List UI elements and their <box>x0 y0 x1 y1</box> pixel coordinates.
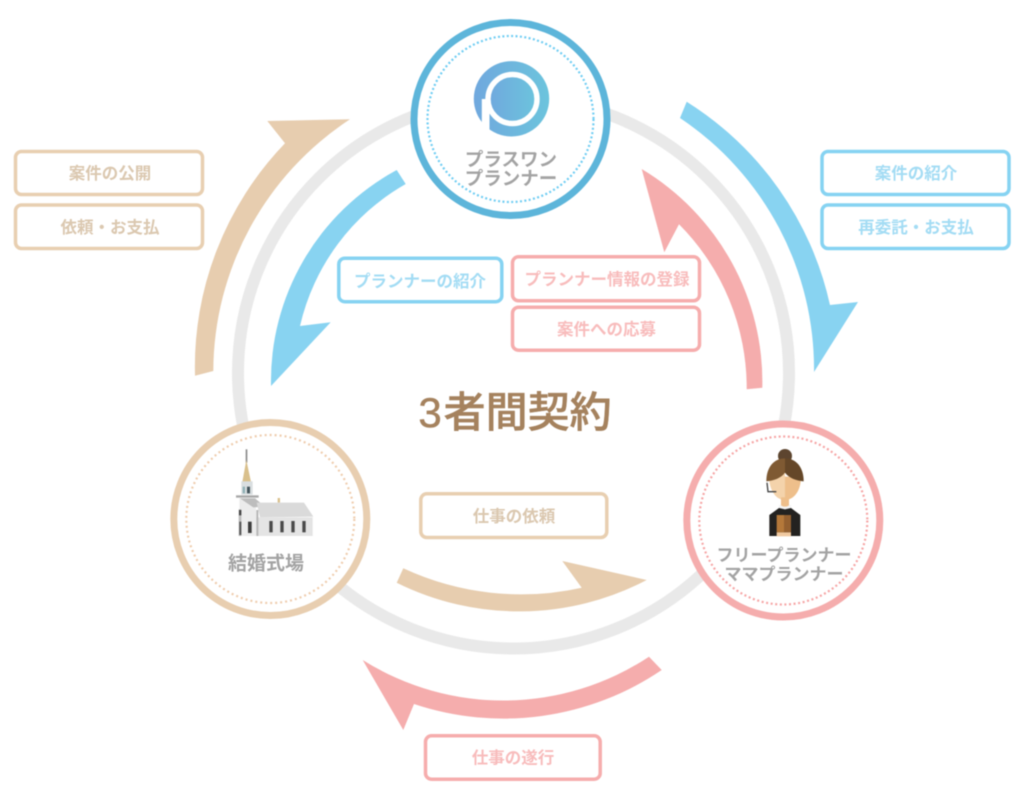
arrow: beige outer left <box>195 119 350 376</box>
arrow: beige inner bottom <box>397 561 647 611</box>
box: re-commission and payment <box>822 205 1009 248</box>
box: work request <box>421 494 607 538</box>
arrow: blue inner left <box>271 170 406 386</box>
box: register planner info: プランナー情報の登録 <box>524 270 690 289</box>
box: work execution <box>426 736 600 779</box>
background cycle ring <box>238 98 789 648</box>
node: wedding venue <box>174 422 367 616</box>
label: wedding venue: 結婚式場 <box>228 552 304 574</box>
node: free planner <box>687 424 880 617</box>
box: introduce planner: プランナーの紹介 <box>354 272 486 291</box>
box: apply for case: 案件への応募 <box>557 320 656 339</box>
box: re-commission and payment: 再委託・お支払 <box>858 217 974 237</box>
box: introduce cases <box>822 152 1009 194</box>
icon: plus one logo <box>474 61 549 140</box>
box: publish cases: 案件の公開 <box>69 164 151 183</box>
title: 3者間契約 <box>418 389 612 436</box>
arrow: blue outer right <box>680 102 858 372</box>
box: apply for case <box>512 307 700 350</box>
label: free planner / mama planner: ママプランナー <box>724 565 844 584</box>
label: plus one planner: プラスワン <box>465 149 557 170</box>
box: work execution: 仕事の遂行 <box>472 748 554 768</box>
box: publish cases <box>16 152 202 194</box>
box: introduce planner <box>339 258 502 302</box>
arrow: pink outer bottom <box>363 657 662 730</box>
box: introduce cases: 案件の紹介 <box>875 164 958 183</box>
box: work request: 仕事の依頼 <box>473 507 556 526</box>
box: request and payment: 依頼・お支払 <box>60 217 160 237</box>
label: plus one planner: プランナー <box>465 168 557 189</box>
box: request and payment <box>16 205 202 248</box>
label: free planner / mama planner: フリープランナー <box>717 546 851 565</box>
box: register planner info <box>512 257 700 301</box>
arrow: pink inner right <box>642 169 762 389</box>
icon: planner woman <box>766 449 804 536</box>
node: plus one planner <box>414 22 607 216</box>
icon: church <box>236 449 313 536</box>
